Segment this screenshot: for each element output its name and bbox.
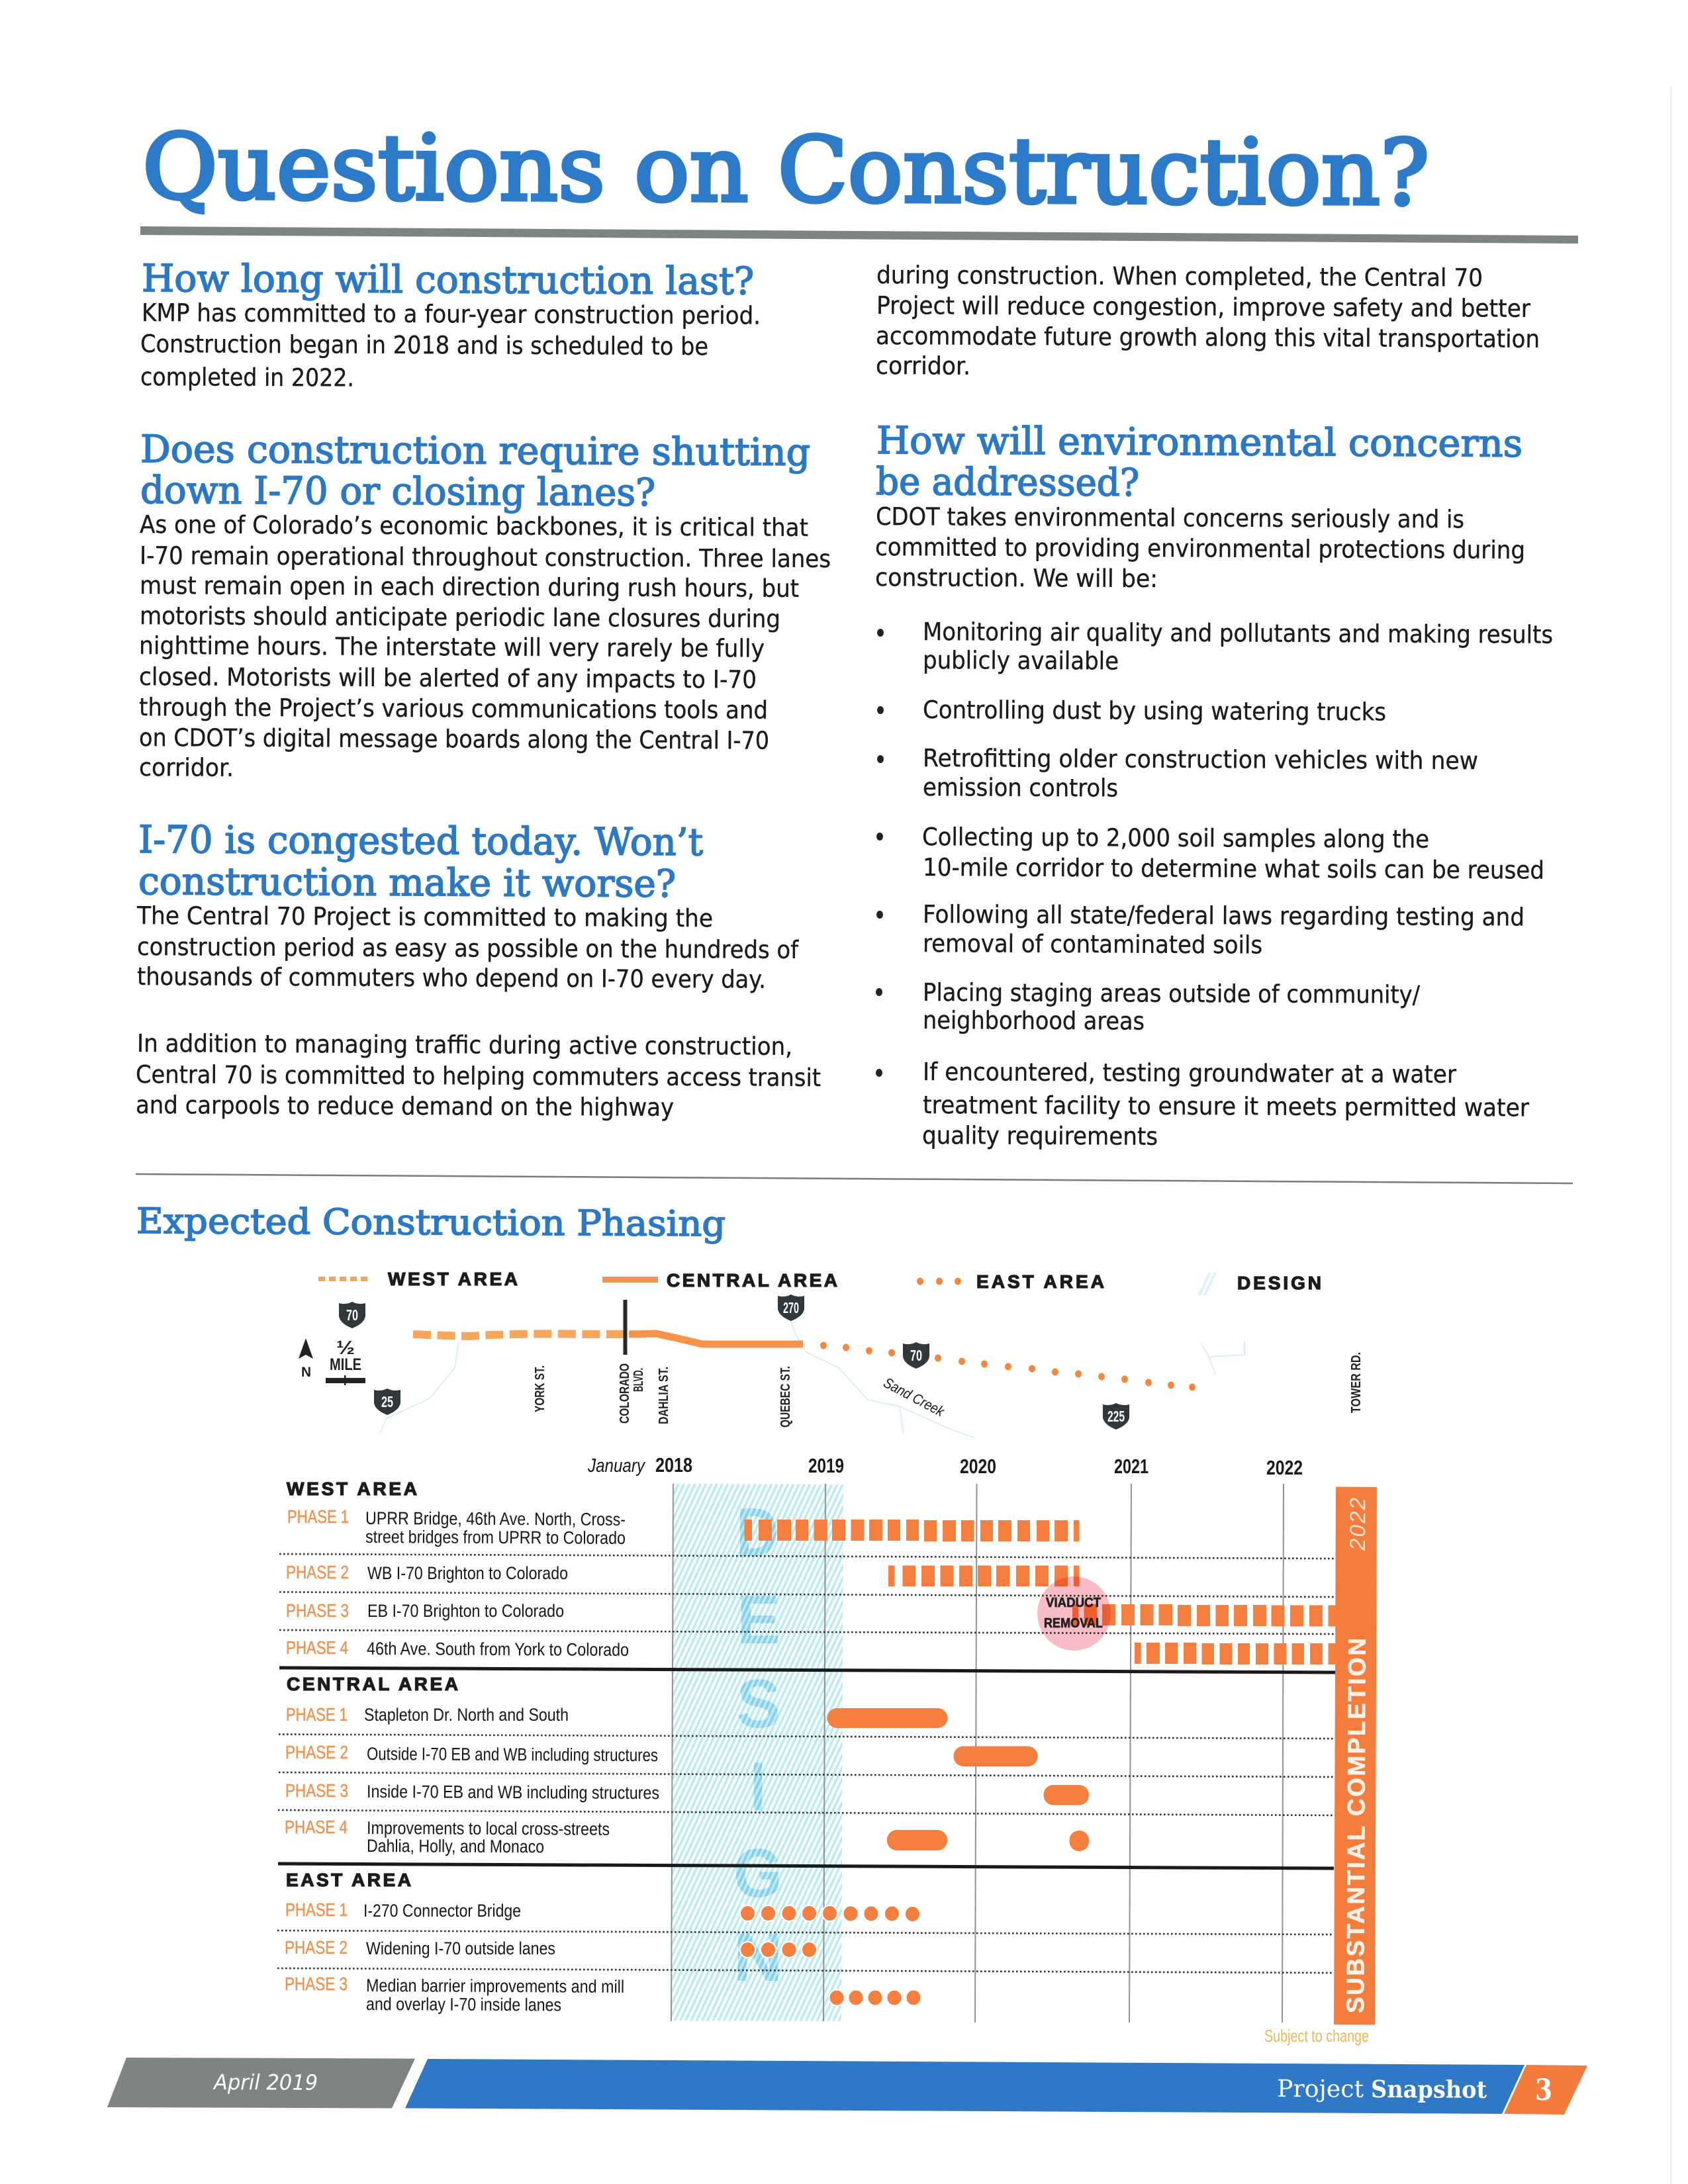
row: central phase 4: Improvements to local cross-streets xyxy=(367,1818,610,1839)
design vertical label: G xyxy=(733,1835,782,1912)
row: west phase 2 xyxy=(286,1562,1079,1586)
row: west phase 2: WB I-70 Brighton to Colorado xyxy=(367,1563,568,1583)
legend xyxy=(318,1269,1321,1295)
substantial completion bar: 2022 xyxy=(1345,1498,1370,1551)
bullet list: environmental protections: Controlling dust by using watering trucks xyxy=(923,696,1386,726)
bullet list: environmental protections xyxy=(876,617,1553,1151)
icon: I-25 shield xyxy=(374,1388,400,1415)
text block: congested: In addition to managing traffic during active construction, xyxy=(137,1029,792,1061)
heading: shutting down: Does construction require shutting xyxy=(140,428,810,475)
text block: shutting down: must remain open in each direction during rush hours, but xyxy=(140,571,799,603)
heading: environmental concerns: How will environmental concerns xyxy=(876,419,1523,466)
heading: shutting down xyxy=(140,428,810,515)
phasing chart xyxy=(277,1453,1377,2046)
street labels: BLVD. xyxy=(632,1368,646,1392)
substantial completion bar: SUBSTANTIAL COMPLETION xyxy=(1342,1638,1371,2013)
footer: project snapshot band xyxy=(405,2059,1524,2114)
text block: congested: construction period as easy as possible on the hundreds of xyxy=(137,933,799,964)
legend: design xyxy=(1197,1273,1321,1295)
text block: shutting down: corridor. xyxy=(139,753,234,782)
row: east phase 2 xyxy=(285,1937,817,1958)
scale bar: ½ xyxy=(336,1338,355,1359)
row: west phase 2: PHASE 2 xyxy=(286,1562,349,1582)
row: west phase 3: EB I-70 Brighton to Colorado xyxy=(367,1601,564,1621)
text block: shutting down: I-70 remain operational throughout construction. Three lanes xyxy=(140,541,831,573)
heading: shutting down: down I-70 or closing lanes? xyxy=(140,469,655,515)
water lines xyxy=(379,1322,1244,1438)
text block: shutting down: through the Project’s various communications tools and xyxy=(139,693,768,725)
icon: I-225 shield: 225 xyxy=(1107,1408,1125,1425)
row: east phase 2: Widening I-70 outside lanes xyxy=(366,1938,555,1958)
row: west phase 1 xyxy=(287,1506,1079,1548)
bullet list: environmental protections: Monitoring air quality and pollutants and making results xyxy=(923,617,1553,649)
Colorado Blvd marker xyxy=(624,1300,628,1355)
footer: page number: 3 xyxy=(1535,2073,1552,2107)
bullet list: environmental protections: Placing staging areas outside of community/ xyxy=(923,978,1421,1009)
design vertical label: N xyxy=(733,1919,782,1996)
heading: congested: construction make it worse? xyxy=(138,860,676,906)
icon: I-70 shield east xyxy=(903,1342,929,1369)
design period band xyxy=(671,1484,843,2021)
text block: shutting down: closed. Motorists will be alerted of any impacts to I-70 xyxy=(139,662,757,694)
text block: shutting down: on CDOT’s digital message boards along the Central I-70 xyxy=(139,723,769,755)
bullet list: environmental protections: Retrofitting older construction vehicles with new xyxy=(923,744,1478,775)
heading: congested: I-70 is congested today. Won’t xyxy=(138,818,703,864)
heading: environmental concerns: be addressed? xyxy=(876,460,1139,505)
callout: viaduct removal xyxy=(1037,1576,1111,1651)
year axis xyxy=(587,1453,1303,1479)
design vertical label: D xyxy=(736,1494,778,1571)
icon: I-25 shield: 25 xyxy=(381,1393,393,1410)
label: Sand Creek: Sand Creek xyxy=(881,1374,947,1420)
row: central phase 1: PHASE 1 xyxy=(286,1704,348,1725)
street labels: DAHLIA ST. xyxy=(657,1367,671,1424)
text block: shutting down: nighttime hours. The interstate will very rarely be fully xyxy=(139,631,765,663)
icon: north arrow xyxy=(299,1338,313,1380)
icon: I-270 shield xyxy=(778,1295,804,1321)
section: I-70 congested xyxy=(136,818,821,1122)
section: shutting down I-70 xyxy=(139,428,831,782)
legend: east area: EAST AREA xyxy=(976,1271,1104,1292)
text block: right column continuation: Project will reduce congestion, improve safety and better xyxy=(876,291,1531,323)
note: subject to change: Subject to change xyxy=(1264,2026,1369,2046)
text block: right column continuation xyxy=(876,261,1540,381)
text block: right column continuation: corridor. xyxy=(876,351,970,381)
row: west phase 4: 46th Ave. South from York to Colorado xyxy=(367,1639,629,1660)
icon: I-270 shield: 270 xyxy=(783,1299,799,1316)
row: west phase 4: PHASE 4 xyxy=(286,1637,348,1658)
footer xyxy=(107,2058,1587,2115)
icon: I-225 shield xyxy=(1103,1403,1129,1430)
row: east phase 1: PHASE 1 xyxy=(285,1899,348,1920)
text block: congested: The Central 70 Project is committed to making the xyxy=(136,901,713,933)
central area road xyxy=(629,1334,803,1344)
bullet list: environmental protections: quality requirements xyxy=(922,1121,1158,1151)
west area rows xyxy=(286,1479,1336,1664)
design vertical label: I xyxy=(750,1749,766,1825)
text block: shutting down xyxy=(139,510,831,782)
year axis: 2018 xyxy=(655,1453,692,1477)
footer: project snapshot band: Project xyxy=(1277,2075,1364,2103)
footer: date tab xyxy=(107,2058,415,2109)
bullet list: environmental protections: Collecting up to 2,000 soil samples along the xyxy=(922,823,1429,854)
legend: central area: CENTRAL AREA xyxy=(667,1270,837,1291)
bullet list: environmental protections: Following all state/federal laws regarding testing and xyxy=(923,900,1524,931)
legend: west area xyxy=(318,1269,518,1289)
bullet list: environmental protections: publicly available xyxy=(923,646,1119,675)
row: west phase 1: street bridges from UPRR to Colorado xyxy=(365,1527,626,1548)
row: central phase 2 xyxy=(285,1742,1038,1766)
legend: west area: WEST AREA xyxy=(388,1269,518,1289)
icon: I-70 shield: 70 xyxy=(346,1306,358,1324)
bullet list: environmental protections: 10-mile corridor to determine what soils can be reused xyxy=(923,853,1544,885)
text block: congested: Central 70 is committed to helping commuters access transit xyxy=(136,1060,821,1092)
section: environmental concerns xyxy=(875,419,1553,1151)
scale bar: MILE xyxy=(330,1355,361,1374)
section: how long will construction last xyxy=(140,257,761,392)
row: west phase 1: UPRR Bridge, 46th Ave. North, Cross- xyxy=(365,1508,626,1529)
row: west phase 1: PHASE 1 xyxy=(287,1506,349,1527)
icon: I-70 shield east: 70 xyxy=(910,1347,922,1364)
heading: how long: How long will construction last? xyxy=(142,257,754,304)
year axis: January xyxy=(587,1455,645,1477)
street labels: QUEBEC ST. xyxy=(778,1366,793,1428)
row: east phase 2: PHASE 2 xyxy=(285,1937,348,1958)
legend: east area xyxy=(917,1271,1104,1292)
icon: I-70 shield xyxy=(339,1302,365,1328)
row: east phase 3 xyxy=(285,1974,921,2015)
row: west phase 3: PHASE 3 xyxy=(286,1600,349,1621)
heading: environmental concerns xyxy=(876,419,1523,505)
footer: project snapshot band: Snapshot xyxy=(1371,2075,1487,2104)
text block: congested: and carpools to reduce demand on the highway xyxy=(136,1091,674,1122)
row: central phase 4: Dahlia, Holly, and Monaco xyxy=(367,1836,544,1856)
text block: congested: thousands of commuters who depend on I-70 every day. xyxy=(137,962,766,994)
bullet list: environmental protections: neighborhood areas xyxy=(923,1006,1145,1036)
substantial completion bar xyxy=(1334,1486,1377,2025)
bullet list: environmental protections: If encountered, testing groundwater at a water xyxy=(923,1058,1457,1089)
text block: how long xyxy=(140,298,761,392)
heading: expected construction phasing: Expected Construction Phasing xyxy=(136,1201,726,1244)
row: central phase 2: PHASE 2 xyxy=(285,1742,348,1762)
text block: how long: completed in 2022. xyxy=(140,363,354,392)
street labels: YORK ST. xyxy=(533,1365,547,1412)
row: central phase 4: PHASE 4 xyxy=(285,1817,348,1837)
icon: north arrow: N xyxy=(301,1365,311,1380)
corridor map xyxy=(299,1295,1364,1438)
text block: environmental intro xyxy=(875,502,1525,593)
east area road dots xyxy=(820,1342,1196,1391)
design vertical label: S xyxy=(737,1666,780,1743)
row: central phase 1: Stapleton Dr. North and South xyxy=(364,1705,569,1725)
heading: west area: WEST AREA xyxy=(287,1479,417,1499)
text block: how long: Construction began in 2018 and is scheduled to be xyxy=(140,330,708,361)
heading: east area: EAST AREA xyxy=(286,1870,411,1890)
street labels xyxy=(533,1352,1364,1428)
callout: viaduct removal: VIADUCT xyxy=(1046,1596,1101,1610)
title rule xyxy=(140,226,1578,244)
text block: environmental intro: construction. We will be: xyxy=(875,563,1158,593)
footer: page number xyxy=(1504,2065,1587,2115)
design vertical label: E xyxy=(737,1582,780,1659)
year axis: 2020 xyxy=(960,1455,996,1478)
text block: right column continuation: accommodate future growth along this vital transportation xyxy=(876,322,1540,353)
street labels: TOWER RD. xyxy=(1349,1352,1364,1413)
row: east phase 3: Median barrier improvements and mill xyxy=(366,1976,624,1997)
title: Questions on Construction? xyxy=(142,115,1430,226)
row: central phase 1 xyxy=(286,1704,948,1728)
text block: right column continuation: during construction. When completed, the Central 70 xyxy=(876,261,1483,292)
central area rows xyxy=(285,1674,1089,1856)
row: west phase 4 xyxy=(286,1637,1336,1664)
heading: central area: CENTRAL AREA xyxy=(287,1674,458,1694)
row: central phase 3: Inside I-70 EB and WB including structures xyxy=(367,1782,659,1803)
footer: date tab: April 2019 xyxy=(212,2070,318,2095)
row: central phase 2: Outside I-70 EB and WB including structures xyxy=(367,1744,658,1765)
scale bar xyxy=(326,1338,365,1385)
row: central phase 3: PHASE 3 xyxy=(285,1780,348,1801)
bullet list: environmental protections: treatment facility to ensure it meets permitted water xyxy=(923,1091,1530,1122)
east area rows xyxy=(285,1870,921,2015)
year axis: 2019 xyxy=(808,1454,844,1477)
design vertical label xyxy=(733,1494,782,1996)
callout: viaduct removal: REMOVAL xyxy=(1044,1616,1103,1631)
row: central phase 4 xyxy=(285,1817,1089,1856)
bullet list: environmental protections: removal of contaminated soils xyxy=(923,929,1262,960)
text block: environmental intro: CDOT takes environmental concerns seriously and is xyxy=(876,502,1464,533)
year axis: 2022 xyxy=(1266,1456,1303,1479)
row: central phase 3 xyxy=(285,1780,1089,1805)
row: west phase 3 xyxy=(286,1600,1336,1627)
text block: environmental intro: committed to providing environmental protections during xyxy=(875,533,1525,565)
west area road xyxy=(413,1334,624,1336)
text block: how long: KMP has committed to a four-year construction period. xyxy=(142,298,761,330)
row: east phase 3: PHASE 3 xyxy=(285,1974,348,1994)
row: east phase 1: I-270 Connector Bridge xyxy=(363,1901,521,1921)
text block: shutting down: motorists should anticipate periodic lane closures during xyxy=(140,602,780,633)
year axis: 2021 xyxy=(1114,1455,1149,1478)
bullet list: environmental protections: emission controls xyxy=(923,773,1118,802)
legend: design: DESIGN xyxy=(1237,1273,1321,1293)
text block: congested xyxy=(136,901,821,1122)
street labels: COLORADO xyxy=(618,1363,632,1424)
heading: congested xyxy=(138,818,703,906)
text block: shutting down: As one of Colorado’s economic backbones, it is critical that xyxy=(140,510,808,542)
row: east phase 3: and overlay I-70 inside lanes xyxy=(366,1994,561,2015)
row: east phase 1 xyxy=(285,1899,920,1922)
